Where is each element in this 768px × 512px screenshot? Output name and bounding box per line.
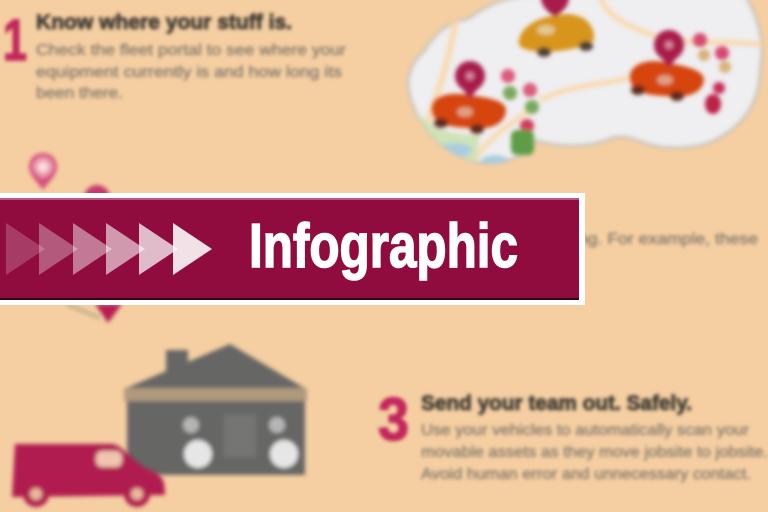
step 1 number: 1 xyxy=(3,8,27,73)
roof band xyxy=(124,388,307,401)
arrow chevrons xyxy=(6,223,212,275)
person icon right xyxy=(269,417,285,433)
banner xyxy=(0,193,585,305)
step 1 heading: Know where your stuff is. xyxy=(36,11,292,34)
door panel xyxy=(224,415,256,457)
roof xyxy=(124,344,306,389)
map shape xyxy=(408,0,762,163)
map illustration xyxy=(408,0,765,170)
walls xyxy=(127,401,305,475)
step 1 text block xyxy=(3,8,347,102)
step 3 body: Avoid human error and unnecessary contact. xyxy=(421,466,751,483)
step 1 body: equipment currently is and how long its xyxy=(36,64,342,81)
step 2 illustration top pin xyxy=(29,153,57,190)
green equipment markers xyxy=(501,69,539,155)
garage building xyxy=(124,344,307,475)
delivery van xyxy=(12,444,165,507)
step 3 body: movable assets as they move jobsite to jobsite. xyxy=(421,444,768,461)
red car left with pin xyxy=(432,61,506,134)
step 1 body: Check the fleet portal to see where your xyxy=(36,42,347,59)
yellow car with pin xyxy=(519,0,594,57)
map roads and park xyxy=(408,0,765,170)
step 3 number: 3 xyxy=(378,386,409,453)
step 3 body: Use your vehicles to automatically scan your xyxy=(421,422,750,439)
banner white frame xyxy=(0,193,585,305)
small markers right xyxy=(693,33,731,114)
step 3 heading: Send your team out. Safely. xyxy=(421,392,692,415)
person icon left xyxy=(183,417,199,433)
banner maroon panel xyxy=(0,198,579,300)
step 2 body visible text: ng. For example, these xyxy=(578,231,758,248)
step 1 body: been there. xyxy=(36,85,123,102)
step 2 illustration partial shapes xyxy=(66,185,122,323)
chimney xyxy=(166,350,188,374)
banner title: Infographic xyxy=(249,212,518,281)
red car right with pin xyxy=(630,30,704,101)
step 3 text block xyxy=(378,386,768,483)
